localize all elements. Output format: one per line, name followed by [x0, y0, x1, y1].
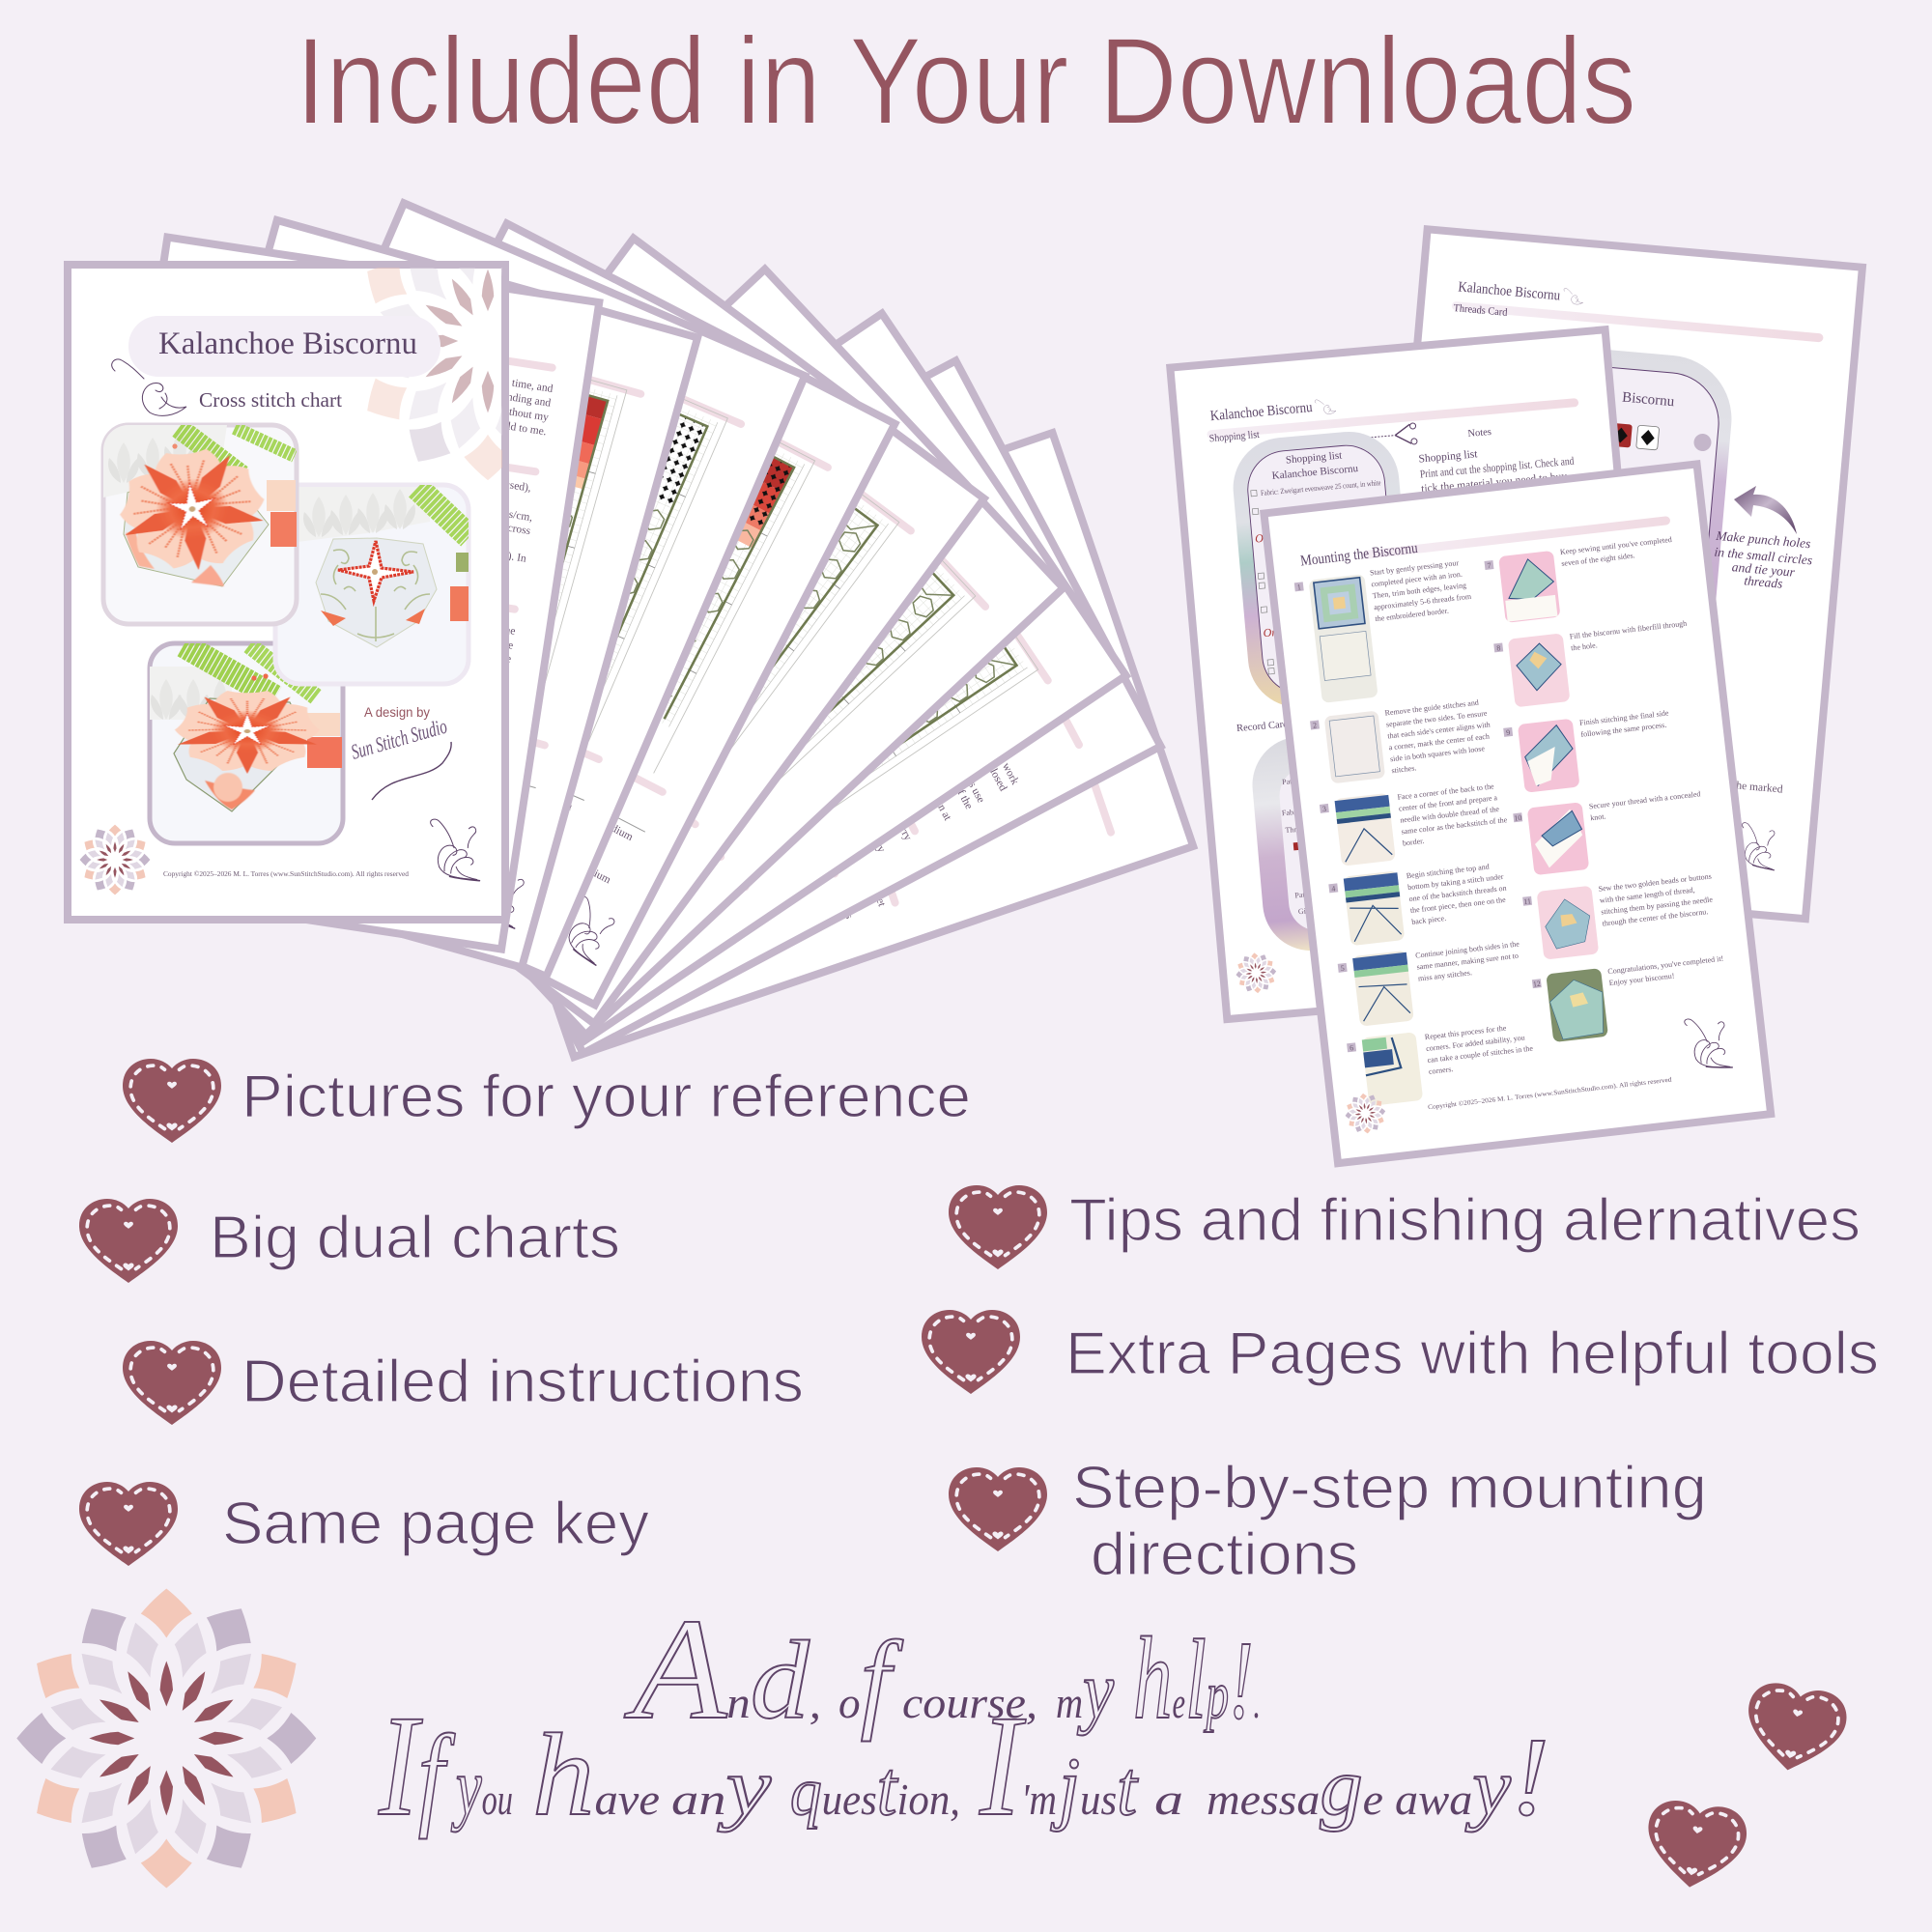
- step 3: [1319, 780, 1511, 868]
- step 12: Enjoy your biscornu!: [1608, 972, 1675, 987]
- signature swash: [372, 742, 451, 800]
- step 11: stitching them by passing the needle: [1601, 895, 1714, 917]
- step 11: with the same length of thread,: [1600, 886, 1695, 905]
- record card: Gift: [1298, 906, 1312, 916]
- photo: back of biscornu on right card: [275, 485, 469, 684]
- "A design by" label: A design by: [364, 705, 430, 720]
- page 1: introduction text page: the world to me.: [473, 415, 548, 438]
- decorative heart upper right: [1739, 1679, 1851, 1778]
- shopping list card: Shopping list: [1285, 450, 1343, 467]
- shopping list card: Fabric: Zweigart evenweave 25 count, in white: [1261, 478, 1381, 497]
- large mandala logo: [16, 1588, 316, 1888]
- step 9: Finish stitching the final side: [1579, 708, 1669, 727]
- step 4: the front piece, then one on the: [1409, 895, 1507, 915]
- page 1: introduction text page: threads/cm,: [480, 504, 533, 524]
- faint mandala decoration: [367, 268, 502, 480]
- page logo: [1235, 952, 1278, 995]
- page heading: Kalanchoe Biscornu: [1458, 279, 1561, 304]
- feature: extras: Extra Pages with helpful tools: [1065, 1321, 1879, 1387]
- step 6: corners.: [1428, 1065, 1454, 1076]
- script message line 1: And,: [623, 1589, 821, 1749]
- feather flourish: [112, 359, 186, 415]
- step 3: center of the front and prepare a: [1398, 793, 1498, 813]
- pink bar: [1207, 398, 1578, 440]
- heart icon: charts: [79, 1199, 178, 1283]
- script message line 2: any: [671, 1742, 771, 1833]
- script message line 1: [623, 1589, 1261, 1749]
- title: Included in Your Downloads: [296, 13, 1636, 151]
- heart icon: key: [79, 1482, 178, 1566]
- page 9: text page: [434, 433, 1193, 1057]
- page 9: text page: stitches: [833, 885, 855, 921]
- record card: Threads: [1285, 824, 1311, 835]
- script message line 2: have: [532, 1710, 660, 1840]
- page 5: swirl chart: [243, 239, 984, 1024]
- instructions text: [1419, 456, 1576, 495]
- heart icon: tips: [949, 1185, 1047, 1269]
- pink bar: [1451, 301, 1824, 342]
- signature: Sun Stitch Studio: [348, 714, 449, 764]
- record card: [1248, 725, 1440, 954]
- step 5: Continue joining both sides in the: [1415, 939, 1520, 960]
- step 1: Start by gently pressing your: [1370, 558, 1460, 577]
- step 2: [1310, 697, 1494, 785]
- page swirl: [1684, 1014, 1732, 1072]
- page 9: text page: threading get: [858, 849, 888, 909]
- feature: instructions: Detailed instructions: [242, 1349, 804, 1415]
- feature: key: Same page key: [222, 1491, 649, 1557]
- page 8: text page: shown at: [924, 781, 953, 823]
- shopping list card: [1229, 428, 1418, 712]
- step 4: Begin stitching the top and: [1406, 863, 1490, 880]
- step 4: back piece.: [1411, 914, 1447, 926]
- step 6: 6: [1350, 1043, 1354, 1053]
- instructions text: tick the material you need to buy.: [1421, 470, 1570, 495]
- page heading: Mounting the Biscornu: [1299, 540, 1419, 570]
- cover swirl: [431, 819, 479, 881]
- step 1: [1293, 557, 1482, 705]
- cover copyright: Copyright ©2025–2026 M. L. Torres (www.SunStitchStudio.com). All rights reserved: [163, 871, 410, 878]
- step 1: Then, trim both edges, leaving: [1372, 581, 1466, 600]
- page 1: introduction text page: be: [499, 652, 512, 666]
- script message line 2: [378, 1686, 1549, 1846]
- step 6: Repeat this process for the: [1424, 1024, 1507, 1041]
- script message line 1: help!.: [1133, 1613, 1261, 1744]
- page 3: black symbol chart: [145, 203, 805, 977]
- step 11: Sew the two golden beads or buttons: [1598, 872, 1712, 894]
- step 12: [1531, 954, 1731, 1044]
- threads card: Biscornu: [1622, 390, 1675, 410]
- page 1: introduction text page: used),: [503, 479, 532, 495]
- script message line 2: question,: [790, 1747, 960, 1832]
- feather icon: [1315, 398, 1336, 415]
- heart icon: mounting: [949, 1467, 1047, 1551]
- step 6: [1347, 1019, 1538, 1108]
- handwritten note: threads: [1744, 573, 1783, 591]
- page 8: text page: how to work: [984, 731, 1021, 787]
- subheading: Shopping list: [1208, 429, 1260, 444]
- step 4: one of the backstitch threads on: [1408, 884, 1507, 903]
- step 10: Secure your thread with a concealed: [1588, 789, 1701, 810]
- fan of chart pages: [70, 203, 1193, 1057]
- step 1: completed piece with an iron.: [1371, 570, 1463, 588]
- page 8: text page: very: [867, 832, 887, 855]
- step 7: seven of the eight sides.: [1561, 551, 1635, 568]
- page 1: introduction text page: are: [498, 639, 514, 652]
- shopping list card: Or: [1254, 530, 1268, 546]
- step 9: following the same process.: [1580, 721, 1667, 739]
- page 4: red symbol chart: Medium: [574, 859, 612, 886]
- script message line 1: of: [838, 1619, 904, 1742]
- notes heading: Notes: [1467, 427, 1492, 440]
- script message line 2: just: [1050, 1742, 1139, 1833]
- step 2: separate the two sides. To ensure: [1385, 709, 1488, 729]
- feather icon: [1563, 288, 1584, 305]
- feature: charts: Big dual charts: [210, 1205, 620, 1271]
- step 10: [1513, 788, 1708, 877]
- step 6: corners. For added stability, you: [1426, 1033, 1525, 1053]
- handwritten note: Make punch holes: [1715, 528, 1811, 551]
- step 3: border.: [1402, 837, 1425, 847]
- step 5: 5: [1340, 964, 1345, 973]
- step 7: 7: [1487, 561, 1492, 570]
- step 4: bottom by taking a stitch under: [1407, 872, 1504, 892]
- step 5: [1337, 937, 1527, 1028]
- feature: pictures: Pictures for your reference: [242, 1064, 971, 1130]
- page 7: swirl chart: [340, 314, 1126, 1041]
- shopping list card: Kalanchoe Biscornu: [1271, 463, 1359, 482]
- threads card page: [1371, 229, 1862, 919]
- step 12: 12: [1532, 980, 1541, 989]
- record card: Pattern: [1294, 890, 1317, 899]
- step 2: a corner, mark the center of each: [1388, 732, 1490, 752]
- step 6: can take a couple of stitches in the: [1427, 1044, 1534, 1065]
- page 1: introduction text page: your support, time, and: [450, 368, 554, 395]
- shopping list card: Or: [1263, 625, 1277, 639]
- script message line 2: I'm: [979, 1686, 1057, 1846]
- step 4: 4: [1331, 884, 1336, 894]
- step 3: 3: [1321, 805, 1326, 813]
- handwritten note: and tie your: [1731, 559, 1796, 580]
- step 7: [1484, 535, 1679, 625]
- step 2: that each side's center aligns with: [1387, 720, 1491, 740]
- record card heading: Record Card: [1236, 719, 1290, 734]
- page 2: red colour chart: [101, 220, 697, 968]
- record card: Notes: [1307, 918, 1325, 927]
- threads card: [1399, 334, 1737, 765]
- cover logo: [80, 825, 150, 895]
- step 1: 1: [1296, 582, 1301, 592]
- page 4: red symbol chart: [207, 223, 895, 1005]
- script message line 2: away!: [1395, 1716, 1549, 1838]
- record card: Fabric: [1282, 808, 1302, 817]
- feature: mounting: directions: [1091, 1521, 1358, 1588]
- decorative heart lower right: [1641, 1797, 1750, 1894]
- script message line 2: message: [1207, 1742, 1383, 1833]
- page 1: introduction text page: in cross: [496, 521, 531, 537]
- designer credit: [348, 705, 451, 800]
- title pill: [128, 316, 440, 377]
- step 4: [1328, 859, 1511, 948]
- page 1: introduction text page: [70, 238, 599, 950]
- page 1: introduction text page: (a). In: [498, 550, 527, 565]
- page 1: introduction text page: one: [498, 624, 516, 638]
- step 3: needle with double thread of the: [1400, 805, 1500, 825]
- scissors and cut line: [1370, 423, 1417, 448]
- page 8: text page: colors of the: [938, 756, 975, 811]
- step 11: 11: [1523, 896, 1531, 906]
- step 11: through the center of the biscornu.: [1602, 907, 1709, 928]
- page 1: introduction text page: without my: [497, 405, 550, 424]
- step 1: the embroidered border.: [1375, 607, 1449, 623]
- photo: flower side of biscornu on upper card: [103, 425, 298, 624]
- cover sheet: [68, 265, 505, 920]
- instructions heading: Shopping list: [1418, 448, 1479, 466]
- page 8: text page: charts use: [955, 760, 986, 805]
- page 8: text page: the enclosed: [973, 739, 1009, 793]
- arrow: punch hole pointer: [1734, 486, 1797, 534]
- step 8: [1493, 619, 1694, 709]
- cover page: Kalanchoe Biscornu: [64, 261, 509, 923]
- feature: mounting: Step-by-step mounting: [1072, 1455, 1707, 1521]
- script message line 2: If: [378, 1686, 456, 1846]
- pink bar: [1361, 516, 1670, 559]
- page 8: text page: carry: [893, 817, 914, 842]
- page copyright: Copyright ©2025–2026 M. L. Torres (www.SunStitchStudio.com). All rights reserved: [1428, 1076, 1673, 1111]
- heart icon: instructions: [123, 1341, 221, 1425]
- step 9: 9: [1506, 728, 1511, 737]
- step 2: side in both squares with loose: [1390, 744, 1486, 763]
- step 8: Fill the biscornu with fiberfill through: [1569, 619, 1688, 640]
- step 3: same color as the backstitch of the: [1401, 815, 1508, 837]
- page 6: swirl chart: [287, 270, 1064, 1035]
- handwritten note: [1714, 528, 1813, 591]
- mounting the biscornu page: [1264, 464, 1771, 1163]
- step 1: approximately 5-6 threads from: [1374, 592, 1472, 611]
- step 3: Face a corner of the back to the: [1397, 781, 1494, 802]
- step 8: 8: [1496, 643, 1501, 653]
- script message line 2: you: [450, 1742, 513, 1833]
- step 2: stitches.: [1391, 763, 1417, 775]
- cover subheading: Cross stitch chart: [199, 388, 342, 412]
- page logo: [1343, 1091, 1388, 1136]
- step 9: [1503, 707, 1676, 794]
- heart icon: extras: [922, 1310, 1020, 1394]
- script message line 1: course,: [902, 1678, 1037, 1727]
- page swirl: [1739, 822, 1777, 870]
- subheading: Threads Card: [1453, 302, 1508, 319]
- step 5: same manner, making sure not to: [1416, 952, 1519, 972]
- step 10: knot.: [1590, 811, 1606, 822]
- feature: tips: Tips and finishing alernatives: [1069, 1187, 1861, 1254]
- shopping list page: [1170, 329, 1662, 1019]
- step 11: [1522, 872, 1719, 961]
- step 2: 2: [1313, 721, 1318, 730]
- instructions text: Print and cut the shopping list. Check and: [1419, 456, 1575, 480]
- step 8: the hole.: [1571, 640, 1598, 652]
- record card: Pattern: [1282, 776, 1304, 786]
- step 7: Keep sewing until you've completed: [1559, 535, 1672, 556]
- bottom text fragment: on the marked: [1719, 779, 1783, 796]
- page 1: introduction text page: understanding and: [469, 385, 552, 410]
- feature: mounting: [1072, 1455, 1707, 1588]
- cover heading: Kalanchoe Biscornu: [158, 327, 417, 361]
- page heading: Kalanchoe Biscornu: [1209, 400, 1314, 424]
- step 2: Remove the guide stitches and: [1384, 698, 1479, 718]
- handwritten note: in the small circles: [1714, 545, 1813, 567]
- heart icon: pictures: [123, 1059, 221, 1143]
- step 10: 10: [1514, 813, 1522, 823]
- script message line 1: my: [1056, 1645, 1114, 1736]
- photo: front of biscornu on lower card: [150, 643, 343, 843]
- page 8: text page: [379, 360, 1161, 1053]
- step 12: Congratulations, you've completed it!: [1607, 954, 1724, 976]
- step 5: miss any stitches.: [1417, 968, 1472, 983]
- script message line 2: a: [1154, 1775, 1183, 1824]
